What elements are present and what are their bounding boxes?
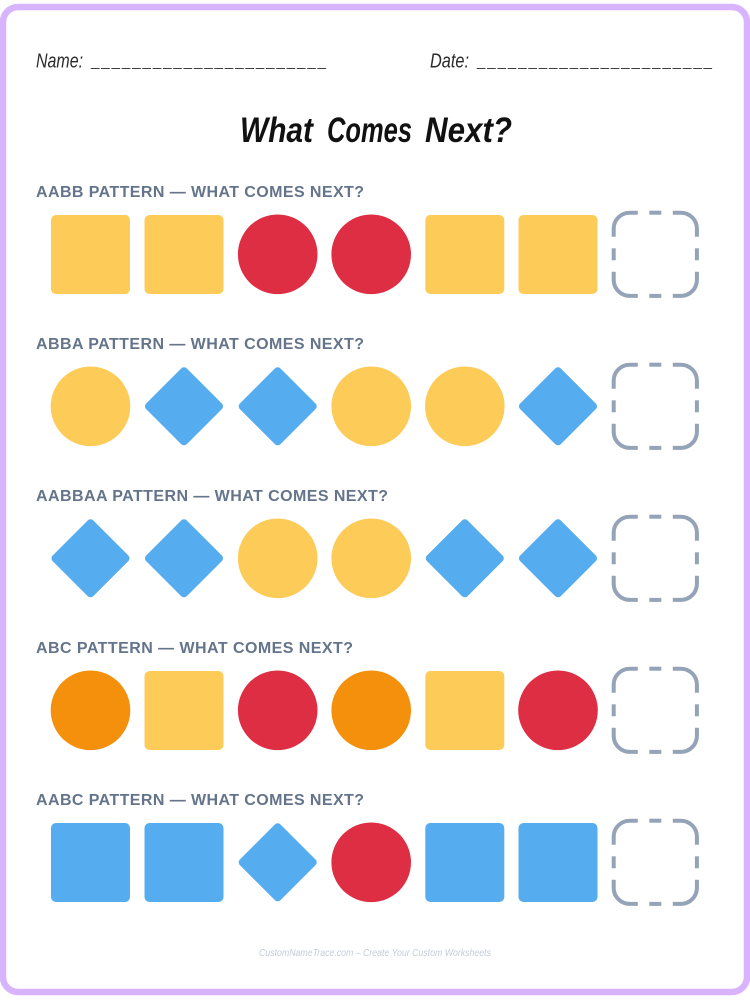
title: What: [240, 111, 314, 150]
name field: _______________________: [90, 53, 327, 70]
shape: blue diamond 2: [149, 523, 219, 593]
shape: red circle 1: [238, 214, 318, 294]
shape: red circle 2: [518, 670, 598, 750]
shape: blue square 2: [144, 823, 224, 902]
shape: orange circle 1: [51, 670, 130, 750]
panel: ABC pattern: [36, 640, 697, 752]
shape: blue square 1: [51, 823, 130, 902]
shape: orange circle 2: [331, 670, 411, 750]
shape: blue square 4: [518, 823, 598, 902]
shape: yellow square 1: [144, 671, 224, 750]
heading: ABBA: ABBA PATTERN — WHAT COMES NEXT?: [36, 336, 364, 353]
heading: ABC: ABC PATTERN — WHAT COMES NEXT?: [36, 640, 353, 657]
date field: [430, 50, 713, 72]
shape: yellow circle 3: [425, 366, 505, 446]
shape: yellow circle 2: [331, 366, 411, 446]
shape: red circle: [331, 822, 411, 902]
panel: AABBAA pattern: [36, 488, 697, 600]
heading: AABBAA: AABBAA PATTERN — WHAT COMES NEXT?: [36, 488, 388, 505]
shape: blue diamond 4: [523, 523, 593, 593]
shape: blue diamond 3: [523, 371, 593, 441]
shape: yellow square 4: [518, 215, 598, 294]
shape: red circle 2: [331, 214, 411, 294]
shape: blue diamond: [243, 827, 313, 897]
shape: blue diamond 3: [430, 523, 500, 593]
shape: blue square 3: [425, 823, 504, 902]
panel: ABBA pattern: [36, 336, 697, 448]
answer box: [614, 517, 697, 600]
name field: Name:: [36, 50, 83, 72]
shape: yellow square 2: [425, 671, 504, 750]
footer: CustomNameTrace.com – Create Your Custom Worksheets: [259, 948, 491, 959]
name field: [36, 50, 327, 72]
title: [240, 111, 512, 150]
answer box: [614, 669, 697, 752]
panel: AABB pattern: [36, 184, 697, 296]
shape: blue diamond 2: [243, 371, 313, 441]
shape: yellow square 1: [51, 215, 130, 294]
answer box: [614, 213, 697, 296]
date field: Date:: [430, 50, 469, 72]
panel: AABC pattern: [36, 792, 697, 904]
answer box: [614, 821, 697, 904]
shape: yellow square 2: [144, 215, 224, 294]
shape: blue diamond 1: [56, 523, 126, 593]
title: Comes: [327, 111, 412, 150]
heading: AABB: AABB PATTERN — WHAT COMES NEXT?: [36, 184, 364, 201]
answer box: [614, 365, 697, 448]
shape: red circle 1: [238, 670, 318, 750]
title: Next?: [425, 111, 512, 150]
shape: yellow circle 1: [238, 518, 318, 598]
shape: blue diamond 1: [149, 371, 219, 441]
date field: _______________________: [476, 53, 713, 70]
shape: yellow circle 2: [331, 518, 411, 598]
shape: yellow circle 1: [51, 366, 130, 446]
shape: yellow square 3: [425, 215, 504, 294]
heading: AABC: AABC PATTERN — WHAT COMES NEXT?: [36, 792, 364, 809]
